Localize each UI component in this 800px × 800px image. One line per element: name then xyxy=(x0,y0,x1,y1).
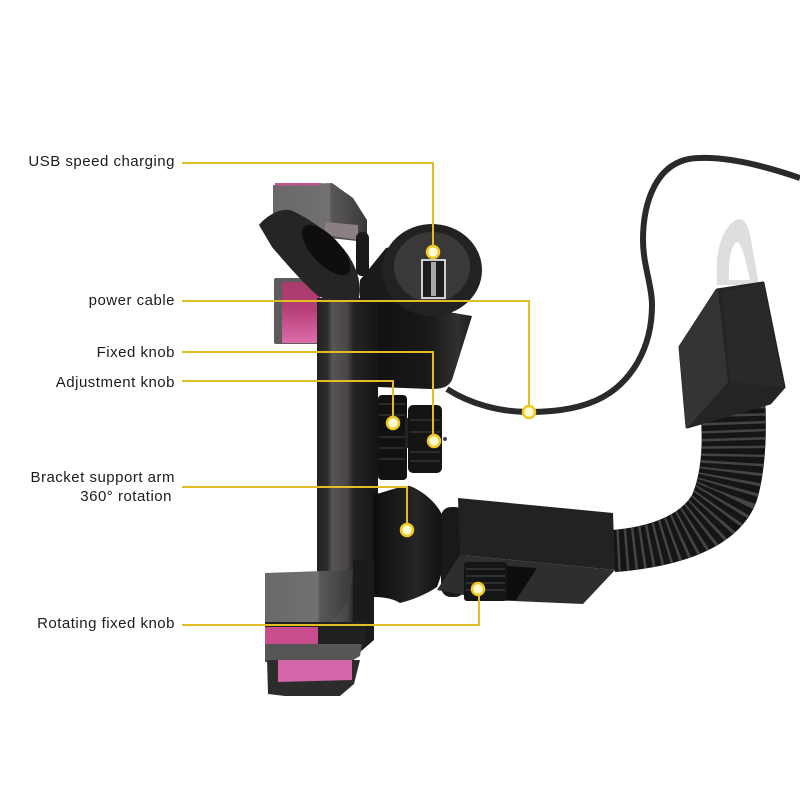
marker dot: Fixed knob xyxy=(428,435,440,447)
rotating fixed knob xyxy=(464,562,507,601)
marker dot: Bracket support arm xyxy=(401,524,413,536)
mirror mount plate xyxy=(717,219,759,285)
rotating arm block xyxy=(437,498,615,604)
label: Adjustment knob: Adjustment knob xyxy=(56,374,175,391)
infographic xyxy=(30,154,800,696)
leader line: Fixed knob xyxy=(182,352,433,441)
gripper bottom xyxy=(265,560,374,696)
fixed knob xyxy=(405,405,447,473)
callout: Rotating fixed knob xyxy=(37,583,484,632)
label: Fixed knob: Fixed knob xyxy=(97,344,175,361)
label: Rotating fixed knob: Rotating fixed knob xyxy=(37,615,175,632)
adjustment knob xyxy=(378,395,407,480)
usb charger body xyxy=(378,224,482,389)
marker dot: Rotating fixed knob xyxy=(472,583,484,595)
marker dot: USB xyxy=(427,246,439,258)
label: power cable: power cable xyxy=(89,292,175,309)
label: 360 degree rotation: 360° rotation xyxy=(80,488,172,505)
callout: power cable xyxy=(89,292,535,418)
holder spine xyxy=(317,298,378,640)
rubber usb cap xyxy=(259,210,400,305)
callout: Fixed knob xyxy=(97,344,440,447)
marker dot: Adjustment knob xyxy=(387,417,399,429)
leader line: USB speed charging xyxy=(182,163,433,252)
mirror clamp block xyxy=(680,283,784,427)
gripper top xyxy=(273,183,367,242)
callout: Bracket support arm xyxy=(30,469,413,536)
label: Bracket support arm: Bracket support arm xyxy=(30,469,175,486)
ball joint xyxy=(373,486,465,603)
leader line: power cable xyxy=(182,301,529,412)
charging cable xyxy=(447,158,800,412)
leader line: Adjustment knob xyxy=(182,381,393,423)
leader line: Rotating fixed knob xyxy=(182,589,479,625)
marker dot: power cable xyxy=(523,406,535,418)
label: USB speed charging: USB speed charging xyxy=(28,153,175,170)
gripper pink pad left xyxy=(274,278,320,344)
product photo: phone holder assembly xyxy=(259,158,800,696)
callout: USB speed charging xyxy=(28,153,439,258)
usb port xyxy=(421,259,446,299)
leader line: Bracket support arm xyxy=(182,487,407,530)
corrugated flexible arm xyxy=(608,390,733,551)
callout: Adjustment knob xyxy=(56,374,399,429)
